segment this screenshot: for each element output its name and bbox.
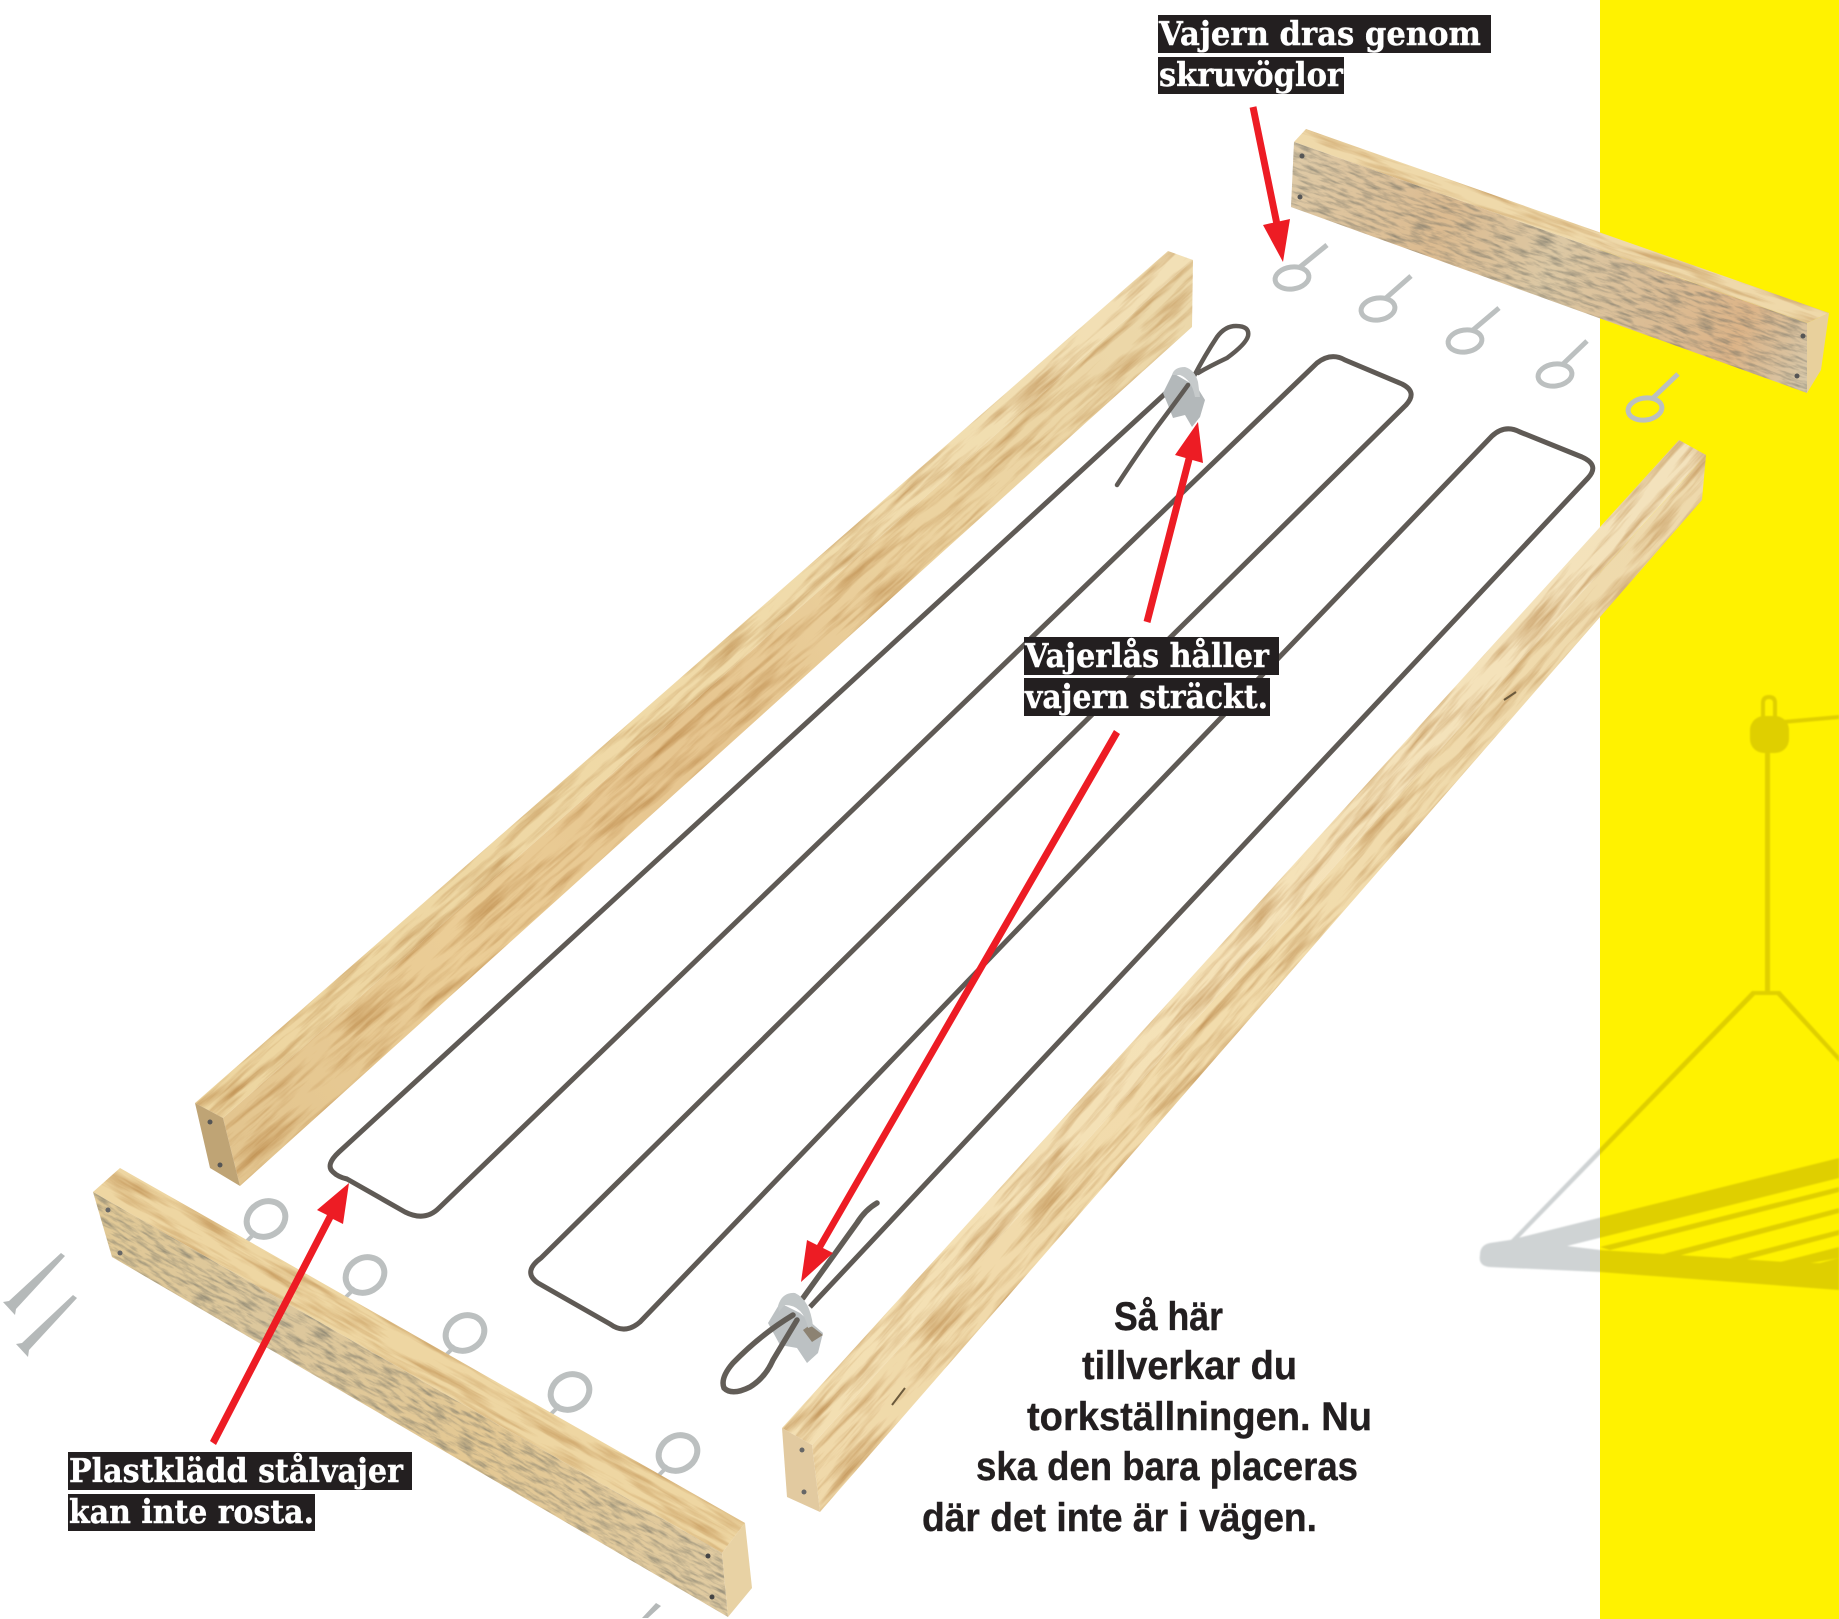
wire tail and loop xyxy=(1117,326,1248,485)
nail 1 xyxy=(3,1253,65,1315)
eye screw 4 xyxy=(544,1367,596,1417)
clamp body xyxy=(1163,373,1205,427)
red arrow: to screw eyes xyxy=(1250,106,1290,262)
eye screw 3 xyxy=(439,1308,491,1358)
eye screws: back row xyxy=(1274,245,1678,422)
side face xyxy=(812,455,1706,1512)
nails xyxy=(3,1253,661,1618)
front face xyxy=(1291,142,1807,393)
wire lock: top xyxy=(1117,326,1248,485)
top face xyxy=(195,251,1193,1118)
callout: Vajerlås håller vajern sträckt: vajern sträckt. xyxy=(1024,677,1268,716)
top face xyxy=(1294,129,1829,323)
yellow side panel xyxy=(1600,0,1839,1619)
eye screw 3 xyxy=(1447,308,1499,354)
front face xyxy=(93,1192,728,1617)
faded shadow of drying rack xyxy=(1480,695,1839,1290)
side face xyxy=(223,260,1193,1186)
wood beam: right long rail xyxy=(782,440,1706,1512)
top face xyxy=(93,1168,745,1553)
callout: Plastklädd stålvajer kan inte rosta: Plastklädd stålvajer xyxy=(69,1451,404,1490)
callout: Vajern dras genom skruvöglor: skruvöglor xyxy=(1159,55,1344,94)
top face xyxy=(782,440,1706,1445)
callout: Vajern dras genom skruvöglor xyxy=(1158,14,1491,94)
end face xyxy=(722,1523,752,1617)
eye screw 5 xyxy=(1627,374,1678,422)
end face xyxy=(1807,313,1829,393)
caption text: där det inte är i vägen. xyxy=(922,1496,1317,1540)
red arrow: to plastic-coated wire xyxy=(210,1183,349,1445)
eye screws: front row xyxy=(240,1194,704,1478)
wire lock: bottom xyxy=(723,1203,877,1392)
eye screw 1 xyxy=(1274,245,1327,291)
nail 3 xyxy=(642,1603,661,1618)
eye screw 1 xyxy=(240,1194,292,1244)
washer xyxy=(1172,367,1200,397)
washer xyxy=(778,1293,813,1328)
callout: Plastklädd stålvajer kan inte rosta: kan inte rosta. xyxy=(69,1492,314,1531)
callout: Vajerlås håller vajern sträckt: Vajerlås håller xyxy=(1024,636,1270,675)
caption text: ska den bara placeras xyxy=(976,1445,1358,1489)
caption text: torkställningen. Nu xyxy=(1027,1395,1372,1439)
callout: Vajern dras genom skruvöglor: Vajern dras genom xyxy=(1158,14,1481,53)
end grain xyxy=(195,1103,240,1186)
shadow on yellow xyxy=(1600,694,1839,1290)
eye screw 4 xyxy=(1537,341,1587,388)
nail 2 xyxy=(16,1295,77,1357)
wood beam: left long rail xyxy=(195,251,1193,1186)
steel wire running through the frame xyxy=(330,357,1593,1329)
red arrow: up to top wire lock xyxy=(1144,422,1203,623)
eye screw 2 xyxy=(339,1250,391,1300)
caption text xyxy=(922,1295,1372,1540)
wood beam: front short rail xyxy=(93,1168,752,1617)
wire tail and loop xyxy=(723,1203,877,1392)
shadow on white xyxy=(1479,1148,1600,1272)
red arrow: down to bottom wire lock xyxy=(801,730,1120,1282)
eye screw 2 xyxy=(1360,276,1411,322)
caption text: Så här xyxy=(1114,1295,1223,1339)
callout: Plastklädd stålvajer kan inte rosta xyxy=(68,1451,412,1531)
caption text: tillverkar du xyxy=(1082,1344,1297,1388)
eye screw 5 xyxy=(652,1428,704,1478)
callout: Vajerlås håller vajern sträckt xyxy=(1024,636,1279,716)
wood beam: top short rail xyxy=(1291,129,1829,393)
clamp body xyxy=(768,1303,823,1363)
end face xyxy=(782,1428,820,1512)
